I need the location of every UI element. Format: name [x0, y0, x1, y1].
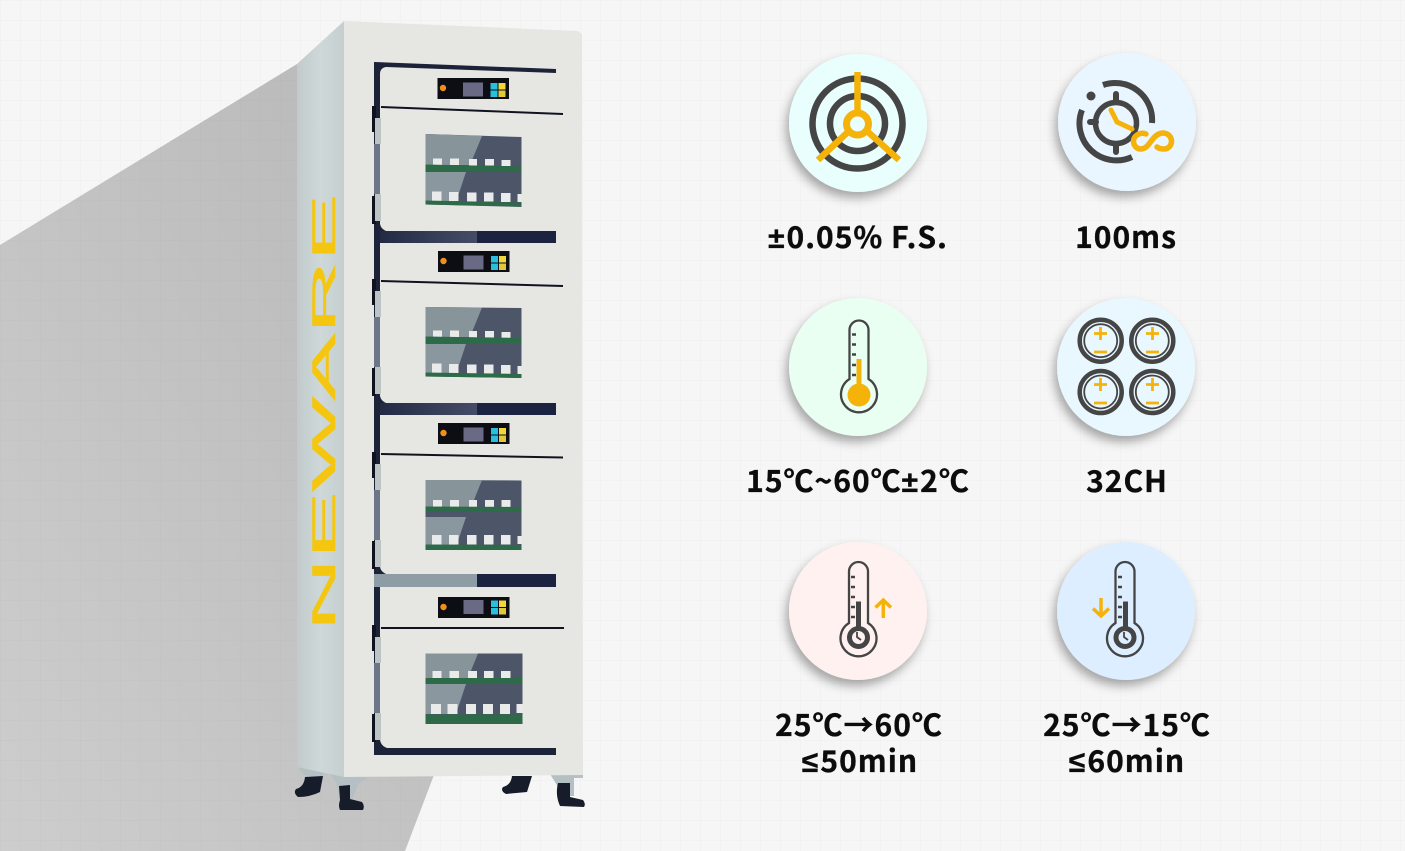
- icon: heating thermometer: [789, 542, 927, 680]
- icon: accuracy target: [789, 54, 927, 192]
- side hinges: [375, 637, 381, 663]
- value: response time: 100ms: [1075, 213, 1177, 257]
- value: heating rate: 25℃→60℃: [775, 701, 943, 745]
- control panel: [438, 423, 510, 444]
- side hinges: [375, 291, 381, 317]
- window: [426, 654, 522, 724]
- window: [426, 480, 522, 550]
- module 2: [372, 243, 563, 415]
- cabinet: [295, 21, 585, 810]
- window: [426, 307, 522, 378]
- spec: temperature range: [746, 298, 970, 501]
- icon: thermometer: [789, 298, 927, 436]
- icon: cooling thermometer: [1057, 542, 1195, 680]
- frame: [374, 415, 386, 575]
- spec: heating rate: [775, 542, 943, 781]
- side hinges: [375, 464, 381, 490]
- value: accuracy: ±0.05% F.S.: [768, 213, 948, 257]
- control panel: [438, 78, 509, 99]
- cabinet cast shadow: [0, 60, 434, 851]
- control panel: [438, 251, 510, 272]
- spec: cooling rate: ≤60min: [1069, 737, 1185, 781]
- spec: response time: [1058, 53, 1196, 257]
- side panel: [297, 21, 344, 777]
- divider line: [381, 280, 563, 287]
- divider line: [381, 627, 564, 629]
- module 1: [372, 62, 563, 243]
- value: cooling rate: 25℃→15℃: [1043, 701, 1211, 745]
- caster brackets: [298, 767, 583, 800]
- window: [426, 134, 522, 207]
- front panel: [344, 21, 583, 777]
- bottom bar: [380, 231, 477, 243]
- icon: response clock: [1058, 53, 1196, 191]
- icon: four batteries: [1057, 298, 1195, 436]
- frame: [374, 587, 556, 755]
- frame: [374, 62, 556, 243]
- module 3: [372, 415, 563, 587]
- spec: channels: [1057, 298, 1195, 501]
- divider line: [381, 106, 563, 115]
- spec: heating rate: ≤50min: [802, 737, 918, 781]
- module 4: [372, 587, 564, 755]
- spec: accuracy: [768, 54, 948, 257]
- value: temperature range: 15℃~60℃±2℃: [746, 457, 970, 501]
- value: channels: 32CH: [1086, 457, 1168, 501]
- spec: cooling rate: [1043, 542, 1211, 781]
- feet: [295, 776, 585, 810]
- bottom bar: [374, 574, 477, 587]
- frame: [374, 243, 386, 415]
- brand name NEWARE: NEWARE: [306, 194, 342, 631]
- bottom bar: [380, 403, 477, 415]
- control panel: [438, 597, 510, 618]
- divider line: [381, 453, 563, 458]
- side hinges: [375, 118, 381, 144]
